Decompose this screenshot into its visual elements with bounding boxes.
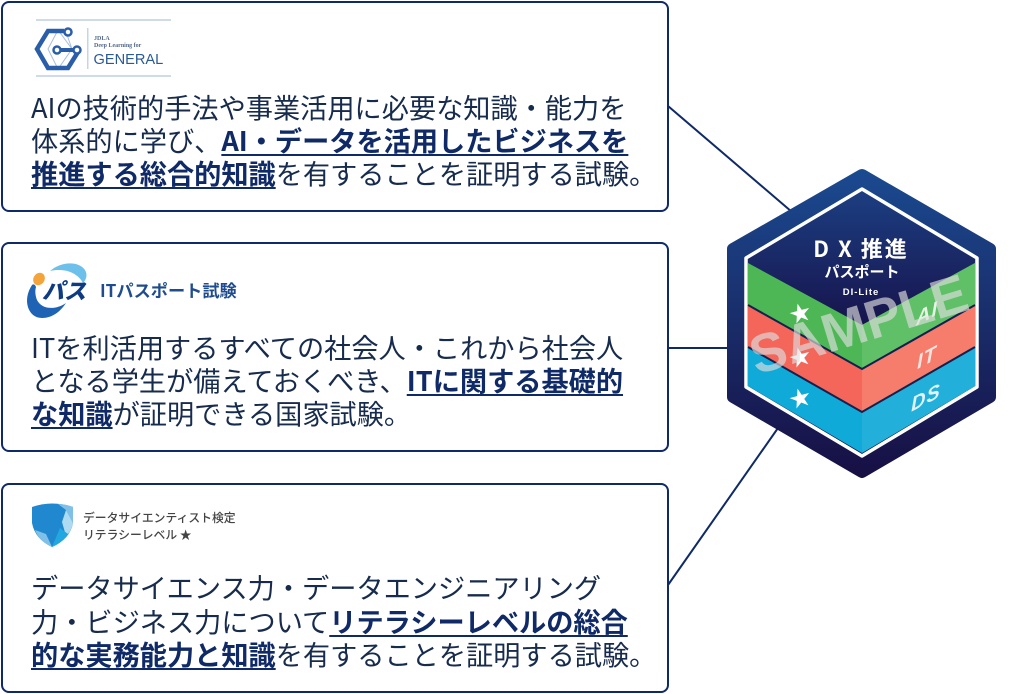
- logo: data scientist exam: データサイエンティスト検定: [83, 509, 236, 526]
- layer: blue DS: [748, 347, 975, 453]
- logo: IT passport exam: ITパスポート試験: [100, 277, 237, 302]
- text block: data scientist description: データサイエンス力・データエンジニアリング: [31, 566, 601, 606]
- badge: DX passport hexagon: ★: [785, 381, 815, 416]
- logo: JDLA Deep Learning for General: Deep Learning for: [94, 43, 142, 49]
- inner top face: [746, 189, 977, 456]
- badge: DX passport hexagon: IT: [917, 341, 938, 374]
- text block: JDLA G description: AIの技術的手法や事業活用に必要な知識・能力を: [31, 86, 626, 126]
- text block: IT passport description: ITを利活用するすべての社会人・これから社会人: [31, 326, 623, 366]
- panel: IT passport: [1, 242, 669, 452]
- text block: IT passport description: な知識が証明できる国家試験。: [31, 392, 411, 432]
- text block: IT passport description: [31, 326, 623, 432]
- watermark: SAMPLE: [742, 263, 975, 386]
- logo: JDLA Deep Learning for General: JDLA: [94, 36, 110, 42]
- badge: DX passport hexagon: DI-Lite: [843, 287, 879, 298]
- text block: JDLA G description: 体系的に学び、AI・データを活用したビジネスを: [31, 119, 628, 159]
- text block: data scientist description: [31, 566, 656, 673]
- text block: JDLA G description: 推進する総合的知識を有することを証明する試験。: [31, 152, 656, 192]
- text block: JDLA G description: [31, 86, 656, 192]
- badge: DX passport hexagon: ★: [785, 340, 815, 375]
- layer separators: [748, 305, 975, 412]
- layer: green AI: [748, 263, 975, 368]
- outer hexagon: [733, 175, 990, 472]
- logo: JDLA Deep Learning for General: GENERAL: [94, 52, 163, 68]
- badge: DX passport hexagon: DS: [911, 378, 941, 417]
- text block: data scientist description: 力・ビジネス力についてリテラシーレベルの総合: [31, 600, 628, 640]
- panel: JDLA G certificate: [1, 1, 669, 212]
- badge title: D X 推進: [813, 232, 909, 264]
- layer labels: AI: [915, 296, 938, 331]
- logo: data scientist exam: リテラシーレベル ★: [83, 526, 192, 543]
- badge: DX passport hexagon: パスポート: [824, 261, 900, 282]
- panel: data scientist literacy: [1, 483, 669, 693]
- logo: data scientist exam: [32, 504, 236, 547]
- logo: JDLA Deep Learning for General: [34, 19, 171, 77]
- stars: ★: [785, 296, 815, 331]
- logo: IT passport exam: [27, 263, 237, 318]
- logo: IT passport exam: パス: [42, 274, 87, 306]
- text block: data scientist description: 的な実務能力と知識を有することを証明する試験。: [31, 633, 656, 673]
- layer: red IT: [748, 305, 975, 412]
- text block: IT passport description: となる学生が備えておくべき、ITに関する基礎的: [31, 359, 623, 399]
